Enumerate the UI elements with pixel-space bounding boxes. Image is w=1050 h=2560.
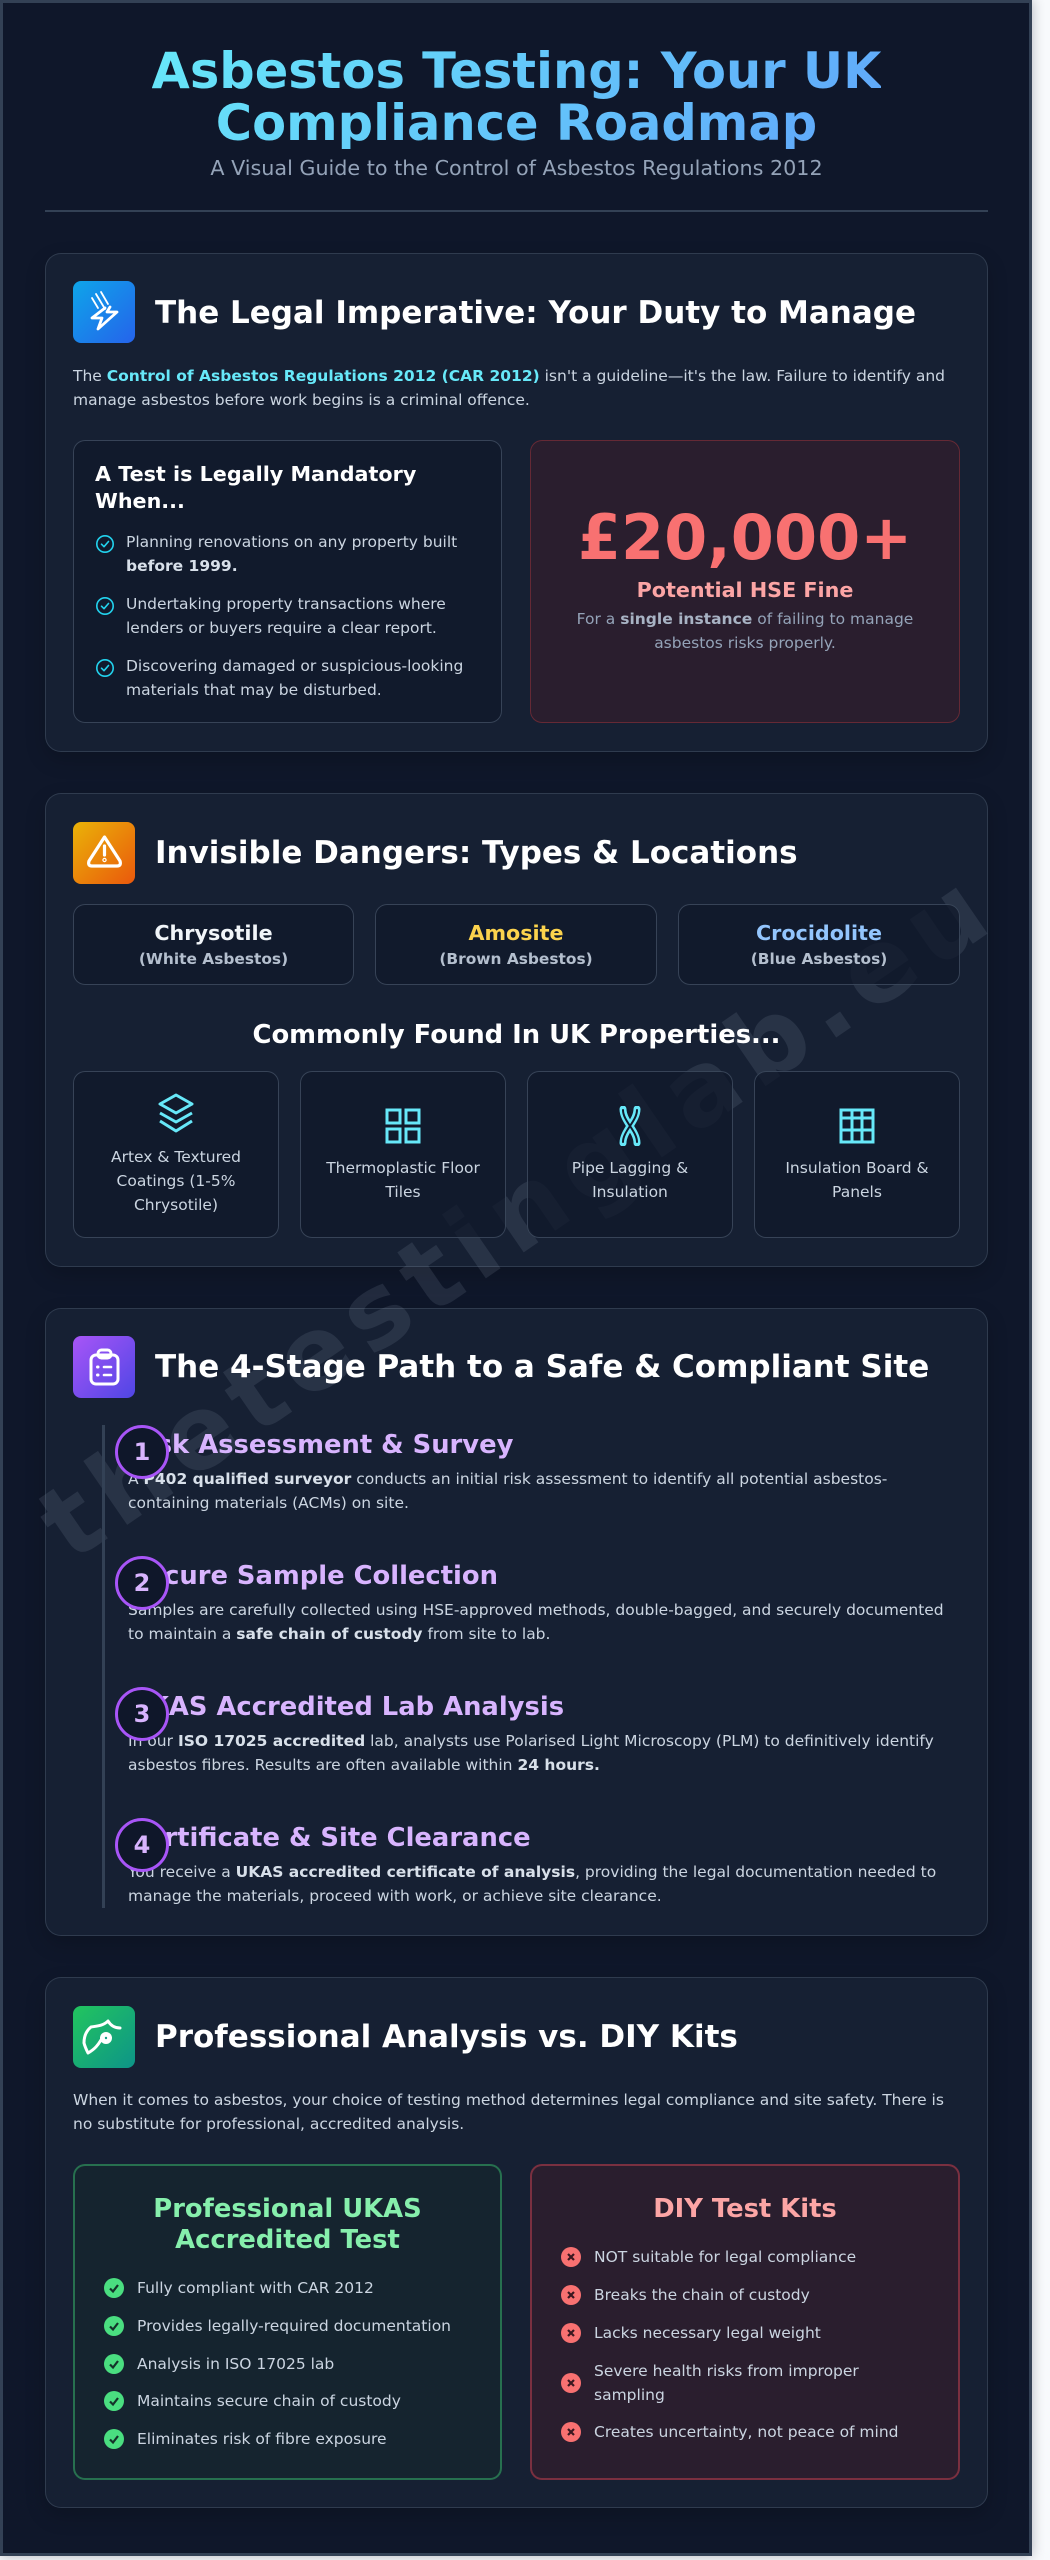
list item: before 1999. bbox=[126, 557, 238, 575]
fine description bbox=[577, 610, 913, 652]
stage 1 bbox=[115, 1425, 887, 1512]
heading: The Legal Imperative: Your Duty to Manage bbox=[155, 295, 916, 331]
title bbox=[152, 42, 881, 152]
type: chrysotile: Chrysotile bbox=[154, 921, 273, 945]
type: chrysotile: (White Asbestos) bbox=[139, 950, 288, 968]
item: Lacks necessary legal weight bbox=[594, 2324, 821, 2342]
title: Asbestos Testing: Your UK bbox=[152, 42, 881, 100]
type: crocidolite bbox=[678, 904, 960, 985]
icon: warning triangle bbox=[73, 822, 135, 884]
list item bbox=[96, 533, 457, 575]
type: amosite: Amosite bbox=[468, 921, 564, 945]
item: sampling bbox=[594, 2386, 665, 2404]
item: Fully compliant with CAR 2012 bbox=[137, 2279, 374, 2297]
type: crocidolite: Crocidolite bbox=[756, 921, 882, 945]
location: artex: Artex & Textured bbox=[111, 1148, 241, 1166]
intro text: manage asbestos before work begins is a criminal offence. bbox=[73, 391, 530, 409]
stage 4 bbox=[115, 1818, 936, 1905]
stage 3: In our ISO 17025 accredited lab, analysts use Polarised Light Microscopy (PLM) to definitively identify bbox=[128, 1732, 934, 1750]
item: Eliminates risk of fibre exposure bbox=[137, 2430, 387, 2448]
icon: pipe bbox=[620, 1106, 640, 1146]
item bbox=[561, 2362, 859, 2404]
stage 4: Certificate & Site Clearance bbox=[128, 1823, 531, 1853]
panel: legally mandatory list bbox=[73, 440, 502, 723]
intro text bbox=[72, 367, 945, 409]
icon: layers bbox=[158, 1094, 194, 1132]
location: floor tiles: Thermoplastic Floor bbox=[326, 1159, 480, 1177]
location: pipe lagging: Pipe Lagging & bbox=[572, 1159, 688, 1177]
subheading: Commonly Found In UK Properties... bbox=[253, 1020, 780, 1050]
stage 4: manage the materials, proceed with work, or achieve site clearance. bbox=[128, 1887, 662, 1905]
heading: Invisible Dangers: Types & Locations bbox=[155, 835, 798, 871]
stage 2 bbox=[115, 1556, 944, 1643]
stage 3 bbox=[115, 1687, 934, 1774]
list heading: A Test is Legally Mandatory bbox=[95, 462, 416, 486]
intro text: no substitute for professional, accredited analysis. bbox=[73, 2115, 464, 2133]
type: crocidolite: (Blue Asbestos) bbox=[751, 950, 887, 968]
icon: tiles bbox=[386, 1108, 420, 1144]
stage 3: asbestos fibres. Results are often available within 24 hours. bbox=[128, 1756, 600, 1774]
panel: invisible dangers bbox=[45, 793, 988, 1267]
panel: professional test bbox=[73, 2164, 502, 2480]
stage 2: 2 bbox=[134, 1569, 150, 1597]
list item: Planning renovations on any property built bbox=[126, 533, 457, 551]
fine label: Potential HSE Fine bbox=[637, 578, 853, 602]
icon: shield bbox=[73, 2006, 135, 2068]
panel: fine callout bbox=[530, 440, 960, 723]
location: artex bbox=[73, 1071, 279, 1238]
location: floor tiles: Tiles bbox=[385, 1183, 421, 1201]
location: insulation board bbox=[754, 1071, 960, 1238]
list item: Discovering damaged or suspicious-looking bbox=[126, 657, 463, 675]
icon: clipboard bbox=[73, 1336, 135, 1398]
fine description: asbestos risks properly. bbox=[654, 634, 836, 652]
stage 2: Secure Sample Collection bbox=[128, 1561, 498, 1591]
location: insulation board: Insulation Board & bbox=[785, 1159, 929, 1177]
intro text: The Control of Asbestos Regulations 2012 (CAR 2012) isn't a guideline—it's the law. Failure to identify and bbox=[73, 367, 945, 385]
fine amount: £20,000+ bbox=[578, 501, 912, 574]
panel: professional vs DIY bbox=[45, 1977, 988, 2508]
item: NOT suitable for legal compliance bbox=[594, 2248, 856, 2266]
panel: legal imperative bbox=[45, 253, 988, 752]
list item: materials that may be disturbed. bbox=[126, 681, 382, 699]
item: Provides legally-required documentation bbox=[137, 2317, 451, 2335]
item: Breaks the chain of custody bbox=[594, 2286, 810, 2304]
location: artex: Coatings (1-5% bbox=[117, 1172, 235, 1190]
fine description: For a single instance of failing to manage bbox=[577, 610, 913, 628]
stage 1: containing materials (ACMs) on site. bbox=[128, 1494, 409, 1512]
stage 1: Risk Assessment & Survey bbox=[128, 1430, 513, 1460]
title: Compliance Roadmap bbox=[216, 94, 817, 152]
location: insulation board: Panels bbox=[832, 1183, 882, 1201]
subtitle: A Visual Guide to the Control of Asbestos Regulations 2012 bbox=[210, 156, 823, 180]
type: amosite: (Brown Asbestos) bbox=[439, 950, 593, 968]
stage 1: A P402 qualified surveyor conducts an initial risk assessment to identify all potential asbestos- bbox=[128, 1470, 887, 1488]
item: Severe health risks from improper bbox=[594, 2362, 859, 2380]
stage 2: to maintain a safe chain of custody from site to lab. bbox=[128, 1625, 550, 1643]
type: chrysotile bbox=[73, 904, 354, 985]
panel heading bbox=[153, 2194, 422, 2255]
item: Analysis in ISO 17025 lab bbox=[137, 2355, 334, 2373]
location: artex: Chrysotile) bbox=[134, 1196, 218, 1214]
panel: DIY kits bbox=[530, 2164, 960, 2480]
list item bbox=[96, 595, 446, 637]
item: Creates uncertainty, not peace of mind bbox=[594, 2423, 898, 2441]
panel heading: Professional UKAS bbox=[153, 2194, 422, 2224]
watermark: thetestinglab.eu bbox=[18, 845, 1018, 1584]
intro text: When it comes to asbestos, your choice of testing method determines legal compliance and site safety. There is bbox=[73, 2091, 944, 2109]
list heading: When... bbox=[95, 489, 185, 513]
location: pipe lagging: Insulation bbox=[592, 1183, 668, 1201]
icon: grid bbox=[840, 1108, 874, 1144]
list item bbox=[96, 657, 463, 699]
location: floor tiles bbox=[300, 1071, 506, 1238]
list item: lenders or buyers require a clear report. bbox=[126, 619, 437, 637]
heading: The 4-Stage Path to a Safe & Compliant Site bbox=[155, 1349, 929, 1385]
intro text bbox=[73, 2091, 944, 2133]
list heading bbox=[95, 462, 416, 513]
stage 3: 3 bbox=[134, 1700, 150, 1728]
stage 4: 4 bbox=[134, 1831, 150, 1859]
item: Maintains secure chain of custody bbox=[137, 2392, 401, 2410]
panel: 4-stage path bbox=[45, 1308, 988, 1936]
panel heading: Accredited Test bbox=[175, 2225, 400, 2255]
list item: Undertaking property transactions where bbox=[126, 595, 446, 613]
heading: Professional Analysis vs. DIY Kits bbox=[155, 2019, 738, 2055]
stage 3: UKAS Accredited Lab Analysis bbox=[128, 1692, 564, 1722]
stage 2: Samples are carefully collected using HSE-approved methods, double-bagged, and securely documented bbox=[128, 1601, 944, 1619]
panel heading: DIY Test Kits bbox=[653, 2194, 837, 2224]
stage 1: 1 bbox=[134, 1438, 150, 1466]
type: amosite bbox=[375, 904, 657, 985]
stage 4: You receive a UKAS accredited certificate of analysis, providing the legal documentation needed to bbox=[128, 1863, 936, 1881]
icon: lightning bolt bbox=[73, 281, 135, 343]
location: pipe lagging bbox=[527, 1071, 733, 1238]
